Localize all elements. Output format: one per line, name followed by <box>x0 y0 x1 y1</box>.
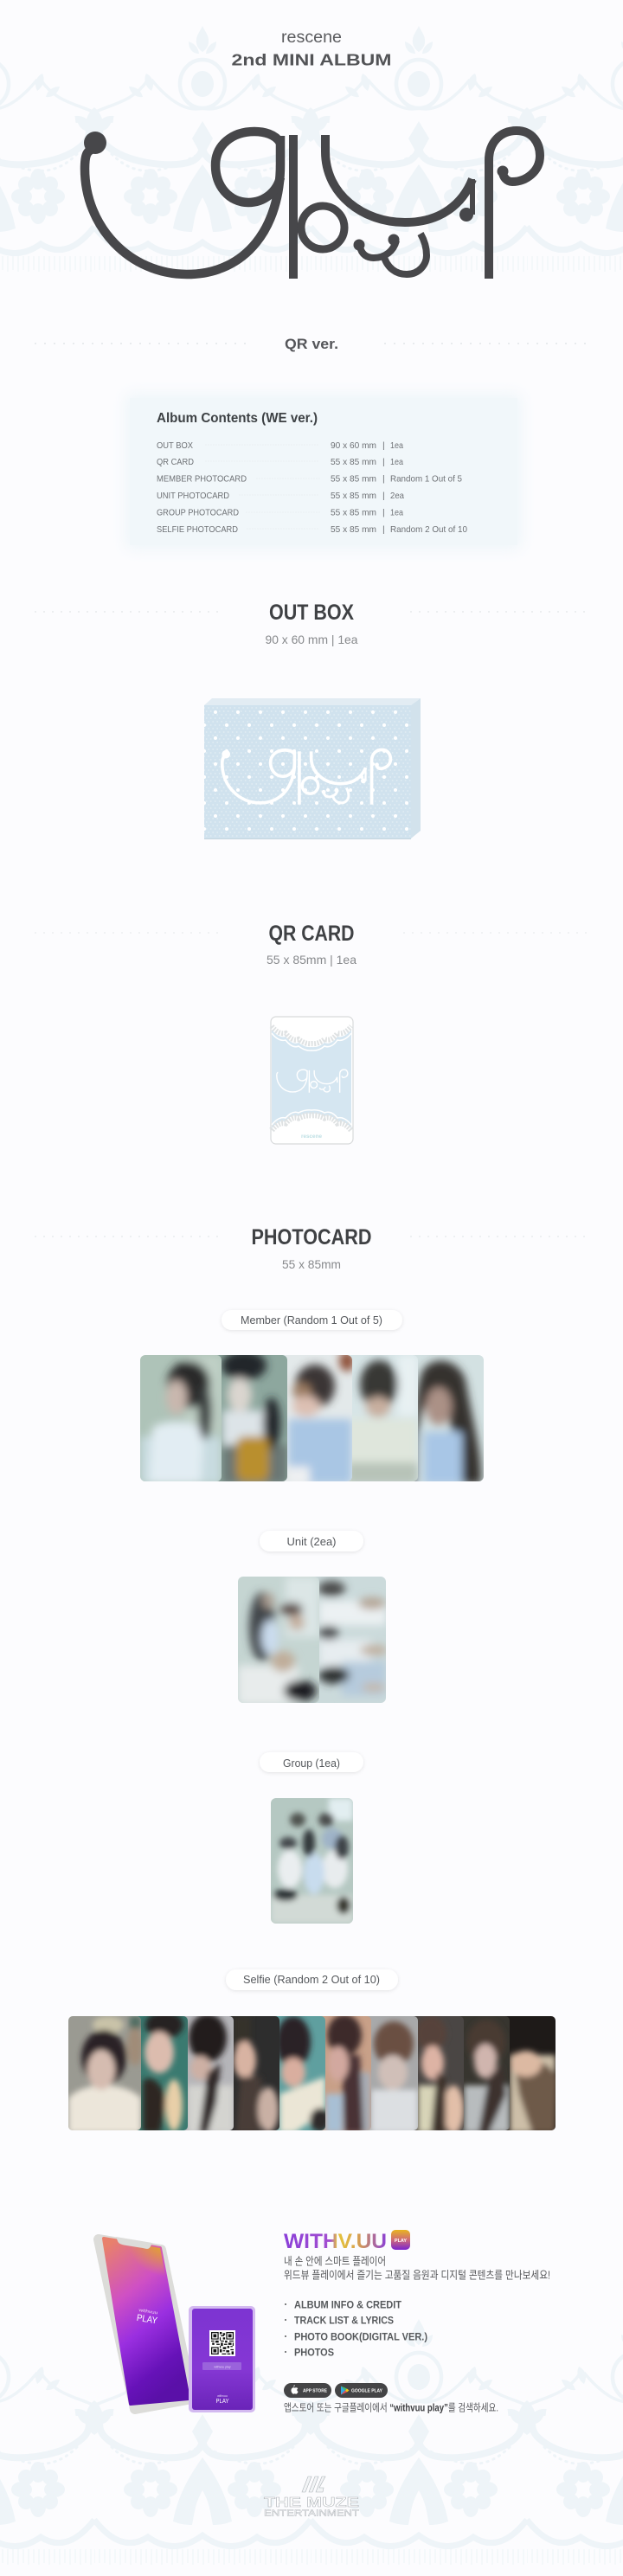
pill: group: Group (1ea) <box>283 1757 340 1770</box>
feature list: ALBUM INFO & CREDIT <box>294 2298 402 2310</box>
qr card wordmark: withvuu <box>217 2394 228 2398</box>
contents row: unit photocard: 2ea <box>390 491 404 501</box>
pill: member: Member (Random 1 Out of 5) <box>241 1314 382 1327</box>
qr card wordmark <box>216 2394 229 2405</box>
heading: out box <box>35 601 588 646</box>
icon: play badge <box>391 2230 410 2250</box>
button: app store <box>284 2383 331 2398</box>
card: unit 1 <box>238 1577 319 1705</box>
contents row: member photocard <box>157 474 462 485</box>
contents row: selfie photocard: | <box>382 524 385 535</box>
card: member 3 <box>284 1355 352 1481</box>
card: selfie 5 <box>275 2016 325 2130</box>
contents row: unit photocard: UNIT PHOTOCARD <box>157 491 229 501</box>
withvuu description <box>284 2255 550 2281</box>
contents row: out box: 90 x 60 mm <box>331 440 376 451</box>
phone body <box>99 2239 192 2409</box>
qr card button <box>202 2362 241 2370</box>
contents row: selfie photocard: SELFIE PHOTOCARD <box>157 524 238 535</box>
pill: member <box>222 1310 402 1330</box>
contents row: selfie photocard <box>157 524 467 535</box>
card small label: rescene <box>301 1134 323 1140</box>
qr card wordmark: PLAY <box>216 2399 229 2405</box>
contents row: unit photocard: 55 x 85 mm <box>331 491 376 501</box>
top lace background <box>0 26 623 279</box>
album label: 2nd MINI ALBUM <box>232 50 391 69</box>
phone screen <box>104 2239 189 2404</box>
card: selfie 2 <box>137 2016 188 2130</box>
heading: qr card: 55 x 85mm | 1ea <box>267 953 356 967</box>
card: member 4 <box>348 1355 418 1481</box>
logo: glow up wordmark <box>84 131 540 279</box>
contents row: unit photocard: | <box>382 491 385 501</box>
phone screen label: withvuu <box>138 2308 158 2316</box>
icon: muze mark <box>302 2476 325 2492</box>
contents row: out box: OUT BOX <box>157 440 193 451</box>
icon: google play <box>341 2386 350 2395</box>
contents row: out box: | <box>382 440 385 451</box>
button: app store: APP STORE <box>303 2388 327 2393</box>
feature list: PHOTO BOOK(DIGITAL VER.) <box>294 2331 427 2343</box>
illustration: phone <box>99 2237 192 2409</box>
contents row: qr card <box>157 457 403 467</box>
photocards: member set <box>140 1351 484 1484</box>
card: member 2 <box>216 1355 287 1481</box>
artist name: rescene <box>281 29 342 47</box>
pill: selfie <box>226 1969 398 1990</box>
logo: the muze entertainment <box>264 2476 359 2518</box>
photocards: selfie set <box>68 2011 558 2134</box>
pill: selfie: Selfie (Random 2 Out of 10) <box>243 1973 380 1986</box>
withvuu description: 위드뷰 플레이에서 즐기는 고품질 음원과 디지털 콘텐츠를 만나보세요! <box>284 2269 550 2281</box>
contents row: qr card: 55 x 85 mm <box>331 457 376 467</box>
card: selfie 7 <box>367 2016 418 2130</box>
illustration: purple qr card <box>189 2306 255 2412</box>
card: selfie 3 <box>183 2016 234 2130</box>
pill: unit <box>260 1531 363 1551</box>
icon: apple <box>291 2385 299 2394</box>
contents row: qr card: QR CARD <box>157 457 194 467</box>
button: google play <box>335 2383 388 2398</box>
version heading with dotted rules: QR ver. <box>285 336 338 352</box>
card: member 1 <box>140 1355 222 1484</box>
contents row: out box <box>157 440 403 451</box>
heading: photocard: 55 x 85mm <box>282 1257 341 1271</box>
heading: out box: 90 x 60 mm | 1ea <box>265 633 358 646</box>
phone notch <box>116 2237 152 2249</box>
heading: qr card <box>35 922 588 967</box>
withvuu description: 내 손 안에 스마트 플레이어 <box>284 2255 386 2267</box>
card: selfie 10 <box>505 2016 556 2130</box>
heading: qr card: QR CARD <box>268 922 355 946</box>
contents row: group photocard: | <box>382 507 385 517</box>
icon: play badge: PLAY <box>395 2239 407 2244</box>
card: selfie 4 <box>229 2016 279 2130</box>
logo on box <box>222 749 390 805</box>
contents heading: Album Contents (WE ver.) <box>157 411 318 426</box>
contents row: selfie photocard: 55 x 85 mm <box>331 524 376 535</box>
logo on card <box>277 1070 348 1093</box>
logo: withvuu play: WITHV.UU <box>284 2230 387 2253</box>
button: google play: GOOGLE PLAY <box>351 2388 382 2393</box>
illustration: purple qr card: withvuu play <box>214 2366 231 2369</box>
contents row: group photocard <box>157 507 403 517</box>
title block <box>232 29 391 69</box>
illustration: qr card <box>271 1017 353 1144</box>
feature list <box>285 2298 427 2359</box>
card: member 5 <box>414 1355 484 1481</box>
heading: photocard <box>35 1225 588 1271</box>
feature list: TRACK LIST & LYRICS <box>294 2314 394 2326</box>
photocard: group <box>271 1798 353 1924</box>
contents row: group photocard: GROUP PHOTOCARD <box>157 507 239 517</box>
contents row: group photocard: 1ea <box>390 507 403 517</box>
heading: out box: OUT BOX <box>269 601 354 625</box>
contents row: member photocard: Random 1 Out of 5 <box>390 474 462 485</box>
card: unit 2 <box>315 1577 386 1703</box>
photocards: unit set <box>238 1577 388 1705</box>
phone screen label <box>136 2308 159 2327</box>
contents row: out box: 1ea <box>390 440 403 451</box>
contents row: member photocard: 55 x 85 mm <box>331 474 376 485</box>
contents row: member photocard: MEMBER PHOTOCARD <box>157 474 247 485</box>
logo: the muze entertainment: THE MUZE <box>264 2496 359 2510</box>
panel: album contents <box>126 395 521 549</box>
heading: photocard: PHOTOCARD <box>251 1225 372 1249</box>
logo: the muze entertainment: ENTERTAINMENT <box>264 2509 359 2518</box>
contents row: member photocard: | <box>382 474 385 485</box>
card: selfie 6 <box>321 2016 371 2130</box>
card: selfie 1 <box>68 2016 143 2133</box>
pill: group <box>260 1752 363 1772</box>
card: selfie 8 <box>414 2016 464 2130</box>
contents row: qr card: | <box>382 457 385 467</box>
contents row: group photocard: 55 x 85 mm <box>331 507 376 517</box>
contents row: qr card: 1ea <box>390 457 403 467</box>
qr code <box>209 2330 235 2356</box>
contents row: selfie photocard: Random 2 Out of 10 <box>390 524 467 535</box>
contents row: unit photocard <box>157 491 404 501</box>
feature list: PHOTOS <box>294 2347 334 2359</box>
search instruction: 앱스토어 또는 구글플레이에서 “withvuu play”를 검색하세요. <box>284 2402 498 2414</box>
bottom lace background <box>0 2319 623 2572</box>
phone screen label: PLAY <box>136 2313 158 2327</box>
pill: unit: Unit (2ea) <box>287 1535 336 1548</box>
illustration: out box <box>204 698 421 839</box>
card: selfie 9 <box>459 2016 510 2130</box>
